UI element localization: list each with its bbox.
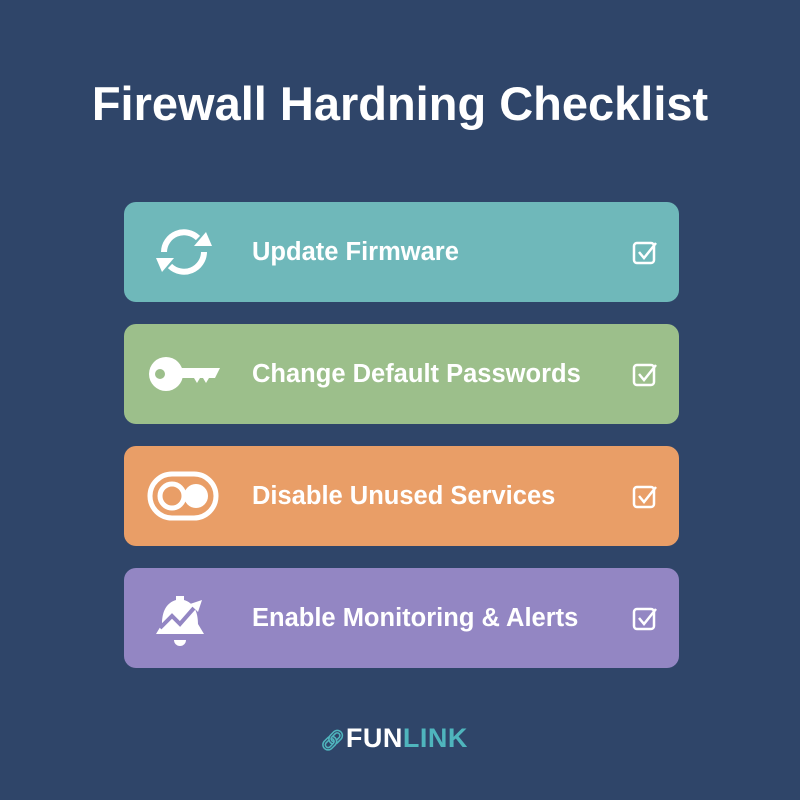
- icon: refresh: [156, 229, 212, 275]
- label: Change Default Passwords: [252, 360, 581, 388]
- label: Enable Monitoring & Alerts: [252, 604, 578, 632]
- icon: key: [149, 357, 220, 391]
- card: update firmware: [124, 202, 679, 302]
- label: Update Firmware: [252, 238, 459, 266]
- icon: bell: [156, 596, 204, 646]
- card: services: [124, 446, 679, 546]
- icon: check: [632, 608, 657, 630]
- logo: 🔗︎FUNLINK: [320, 723, 468, 753]
- title: Firewall Hardning Checklist: [92, 77, 708, 130]
- icon: check: [632, 486, 657, 508]
- icon: check: [632, 364, 657, 386]
- card: passwords: [124, 324, 679, 424]
- label: Disable Unused Services: [252, 482, 555, 510]
- card: monitoring: [124, 568, 679, 668]
- icon: toggle: [148, 472, 218, 520]
- icon: check: [632, 242, 657, 264]
